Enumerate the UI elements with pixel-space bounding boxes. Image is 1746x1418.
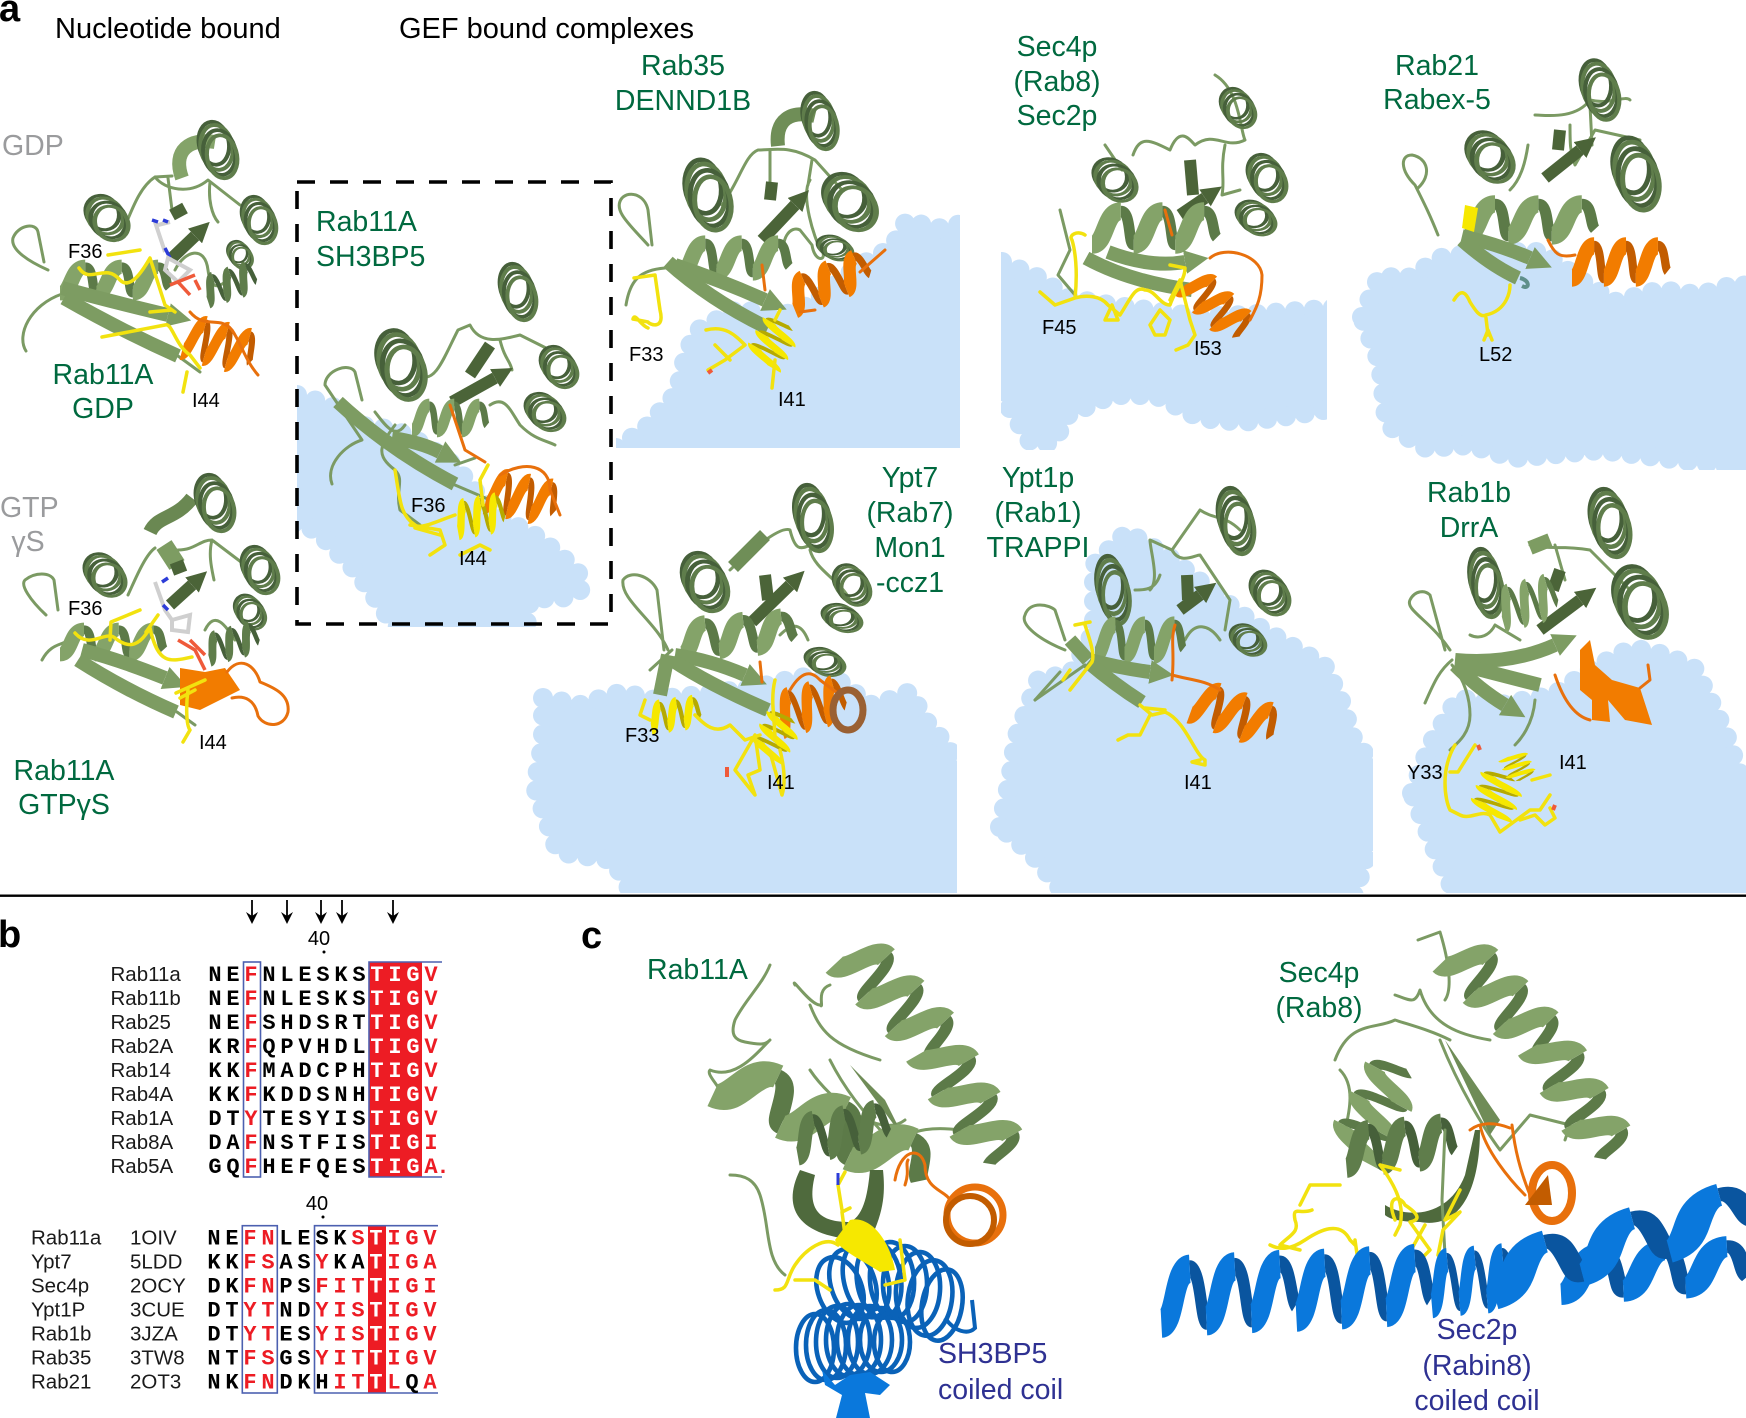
label: Ypt1p Rab1 TRAPPI <box>987 462 1089 564</box>
label: Rab1b DrrA <box>1427 477 1511 544</box>
alignment table: Rab family: TESYIS <box>262 1107 366 1132</box>
protein: Rab21 <box>1403 58 1668 340</box>
alignment table: GEF-bound structures: YIT <box>315 1346 365 1372</box>
alignment table: Rab family: F <box>244 987 258 1012</box>
label: Rab1b DrrA: DrrA <box>1440 512 1498 544</box>
GEF surface: SH3BP5 <box>290 395 583 627</box>
alignment table: Rab family: F <box>244 963 258 988</box>
alignment table: GEF-bound structures: NT <box>207 1346 239 1372</box>
alignment table: GEF-bound structures: IGV <box>387 1298 437 1324</box>
alignment table: GEF-bound structures: A <box>423 1370 437 1396</box>
alignment table: GEF-bound structures: NK <box>207 1370 239 1396</box>
alignment table: GEF-bound structures: YIS <box>315 1298 365 1324</box>
protein: Rab11A GTPgammaS <box>24 472 288 742</box>
GEF surface: TRAPPI <box>1000 532 1380 900</box>
alignment table: Rab family: DT <box>208 1107 240 1132</box>
alignment table: Rab family: F <box>244 1083 258 1108</box>
alignment table: Rab family: MADCPH <box>262 1059 366 1084</box>
label: GDP state: GDP <box>2 130 64 162</box>
GEF surface: Sec2p <box>1002 262 1335 443</box>
GEF surface: DENND1B <box>610 220 968 456</box>
alignment table: GEF-bound structures: Rab11a <box>31 1226 102 1250</box>
alignment table: Rab family: QPVHDL <box>262 1035 366 1060</box>
alignment table: Rab family: NLESKS <box>262 963 366 988</box>
label: F33: F33 <box>629 344 663 366</box>
protein: Rab11A with SH3BP5 coiled coil <box>709 935 1019 1418</box>
alignment table: Rab family: TIG <box>370 987 420 1012</box>
label: Ypt7 Rab7 Mon1-ccz1: Ypt7 <box>882 462 938 494</box>
alignment table: GEF-bound structures: T <box>369 1346 383 1372</box>
label: Sec2p Rabin8 coiled coil: coiled coil <box>1414 1385 1540 1417</box>
label: Sec4p Rab8 Sec2p <box>1013 31 1101 132</box>
label: Ypt7 Rab7 Mon1-ccz1 <box>866 462 954 599</box>
alignment table: Rab family: SHDSRT <box>262 1011 366 1036</box>
alignment table: Rab family: F <box>244 1131 258 1156</box>
alignment table: GEF-bound structures: T <box>369 1250 383 1276</box>
label: I41: I41 <box>767 772 795 794</box>
label: Rab11A GDP: Rab11A <box>53 359 153 391</box>
alignment table: Rab family: I <box>424 1131 438 1156</box>
alignment table: GEF-bound structures: Y <box>315 1250 329 1276</box>
label: Rab11A GTPgammaS: Rab11A <box>14 755 114 787</box>
heading: nucleotide bound: Nucleotide bound <box>55 13 281 45</box>
label: Sec4p Rab8: (Rab8) <box>1275 992 1363 1024</box>
alignment table: GEF-bound structures: FN <box>243 1226 275 1252</box>
alignment table: Rab family: TIG <box>370 1107 420 1132</box>
alignment table: GEF-bound structures: 3JZA <box>130 1322 178 1346</box>
alignment table: Rab family: Y <box>244 1107 258 1132</box>
alignment table: Rab family: Rab1A <box>110 1107 174 1130</box>
panel letter c: c <box>581 915 602 957</box>
alignment table: GEF-bound structures: YT <box>243 1298 275 1324</box>
divider between panels <box>0 894 1746 897</box>
alignment table: GEF-bound structures: 5LDD <box>130 1250 182 1274</box>
alignment table: Rab family: KK <box>208 1083 240 1108</box>
label: F36: F36 <box>411 495 445 517</box>
label: Rab35 DENND1B: Rab35 <box>641 50 725 82</box>
label: Sec4p Rab8 Sec2p: (Rab8) <box>1013 66 1101 98</box>
alignment table: Rab family: Rab25 <box>110 1011 171 1034</box>
alignment table: GEF-bound structures <box>31 1226 437 1396</box>
alignment table: GEF-bound structures: KA <box>333 1250 365 1276</box>
protein: Rab11A bound to SH3BP5 <box>325 261 580 555</box>
label: GTPgammaS state: GTP <box>0 492 59 524</box>
alignment table: Rab family: V <box>424 987 438 1012</box>
alignment table: GEF-bound structures: T <box>369 1370 383 1396</box>
alignment table: GEF-bound structures: Rab35 <box>31 1346 91 1370</box>
protein: Ypt7 <box>623 482 873 795</box>
label: Rab21 Rabex-5: Rab21 <box>1395 50 1479 82</box>
label: Rab11A SH3BP5: SH3BP5 <box>316 241 425 273</box>
alignment table: GEF-bound structures: 2OT3 <box>130 1370 181 1394</box>
label: Sec2p Rabin8 coiled coil: (Rabin8) <box>1422 1350 1532 1382</box>
label: F36: F36 <box>68 598 102 620</box>
alignment table: Rab family: TIG <box>370 963 420 988</box>
alignment table: Rab family: Rab4A <box>110 1083 174 1106</box>
alignment table: GEF-bound structures: Q <box>405 1370 419 1396</box>
label: I41: I41 <box>778 389 806 411</box>
label: Ypt7 Rab7 Mon1-ccz1: (Rab7) <box>866 497 954 529</box>
alignment table: GEF-bound structures: Ypt1P <box>31 1298 85 1322</box>
protein: Rab11A GDP <box>13 119 279 392</box>
alignment table: Rab family: Rab11b <box>110 987 181 1010</box>
alignment table: GEF-bound structures: FS <box>243 1250 275 1276</box>
GEF surface: Mon1-ccz1 <box>535 677 965 900</box>
alignment table: Rab family <box>110 963 450 1180</box>
alignment table: GEF-bound structures: L <box>387 1370 401 1396</box>
alignment highlight: conserved threonine column <box>242 1226 438 1393</box>
label: I53: I53 <box>1194 338 1222 360</box>
alignment table: GEF-bound structures: FIT <box>315 1274 365 1300</box>
alignment table: Rab family: V <box>424 1011 438 1036</box>
dashed box: Rab11A SH3BP5 highlight <box>297 182 611 624</box>
label: I41: I41 <box>1184 772 1212 794</box>
label: Sec2p Rabin8 coiled coil: Sec2p <box>1437 1314 1517 1346</box>
alignment table: Rab family: TIG <box>370 1155 420 1180</box>
alignment table: GEF-bound structures: IGI <box>387 1274 437 1300</box>
label: L52: L52 <box>1479 344 1512 366</box>
alignment table: GEF-bound structures: FS <box>243 1346 275 1372</box>
label: SH3BP5 coiled coil: coiled coil <box>938 1374 1063 1406</box>
alignment table: GEF-bound structures: IGV <box>387 1226 437 1252</box>
alignment table: GEF-bound structures: ND <box>279 1298 311 1324</box>
panel a: nucleotide-bound and GEF-bound structures <box>0 0 1746 900</box>
alignment table: Rab family: NSTFIS <box>262 1131 366 1156</box>
alignment table: GEF-bound structures: H <box>315 1370 329 1396</box>
alignment table: GEF-bound structures: Rab1b <box>31 1322 91 1346</box>
alignment table: Rab family: F <box>244 1011 258 1036</box>
alignment table: Rab family: TIG <box>370 1131 420 1156</box>
protein: Sec4p <box>1040 75 1289 350</box>
position marker: 40: 40 <box>308 928 330 950</box>
label: Ypt1p Rab1 TRAPPI: Ypt1p <box>1002 462 1074 494</box>
alignment table: Rab family: NLESKS <box>262 987 366 1012</box>
alignment table: Rab family: TIG <box>370 1083 420 1108</box>
label: Sec4p Rab8 <box>1275 957 1363 1024</box>
label: Sec2p Rabin8 coiled coil <box>1414 1314 1540 1417</box>
alignment table: Rab family: NE <box>208 963 240 988</box>
alignment table: Rab family: F <box>244 1035 258 1060</box>
alignment table: GEF-bound structures: DK <box>279 1370 311 1396</box>
alignment table: Rab family: TIG <box>370 1011 420 1036</box>
label: Y33: Y33 <box>1407 762 1443 784</box>
alignment table: Rab family: TIG <box>370 1035 420 1060</box>
label: I44: I44 <box>459 548 487 570</box>
alignment table: Rab family: NE <box>208 1011 240 1036</box>
label: F36: F36 <box>68 241 102 263</box>
label: SH3BP5 coiled coil: SH3BP5 <box>938 1338 1047 1370</box>
alignment table: GEF-bound structures: KK <box>207 1250 239 1276</box>
GEF surface: Rabex-5 <box>1362 252 1746 470</box>
protein: Rab35 <box>619 90 885 388</box>
alignment table: GEF-bound structures: YIS <box>315 1322 365 1348</box>
label: Ypt7 Rab7 Mon1-ccz1: Mon1 <box>874 532 946 564</box>
alignment table: GEF-bound structures: T <box>369 1226 383 1252</box>
label: GTPgammaS state: γS <box>11 526 45 558</box>
panel b: sequence alignments <box>0 900 450 1396</box>
GEF surface: DrrA <box>1412 648 1746 900</box>
alignment table: Rab family: A. <box>424 1155 450 1180</box>
alignment table: GEF-bound structures: YT <box>243 1322 275 1348</box>
label: Rab11A GDP <box>53 359 153 425</box>
label: Ypt7 Rab7 Mon1-ccz1: -ccz1 <box>876 567 944 599</box>
alignment table: Rab family: V <box>424 1107 438 1132</box>
alignment table: GEF-bound structures: DK <box>207 1274 239 1300</box>
alignment table: Rab family: F <box>244 1155 258 1180</box>
alignment table: Rab family: Rab2A <box>110 1035 174 1058</box>
label: Rab11A GDP: GDP <box>72 393 134 425</box>
alignment table: GEF-bound structures: 3CUE <box>130 1298 185 1322</box>
protein: Rab1b <box>1409 486 1670 832</box>
alignment table: GEF-bound structures: T <box>369 1274 383 1300</box>
alignment table: GEF-bound structures: DT <box>207 1322 239 1348</box>
alignment table: GEF-bound structures: 2OCY <box>130 1274 186 1298</box>
alignment table: GEF-bound structures: 1OIV <box>130 1226 177 1250</box>
heading: GEF bound complexes: GEF bound complexes <box>399 13 694 45</box>
label: Rab11A GTPgammaS <box>14 755 114 821</box>
panel c: coiled coil interaction comparison <box>581 915 1746 1418</box>
protein: Ypt1p <box>1024 485 1292 765</box>
alignment table: GEF-bound structures: AS <box>279 1250 311 1276</box>
label: Rab1b DrrA: Rab1b <box>1427 477 1511 509</box>
alignment table: Rab family: KDDSNH <box>262 1083 366 1108</box>
alignment table: Rab family: NE <box>208 987 240 1012</box>
alignment table: Rab family: Rab8A <box>110 1131 174 1154</box>
label: Ypt1p Rab1 TRAPPI: (Rab1) <box>994 497 1082 529</box>
protein: Sec4p with Sec2p coiled coil <box>1159 932 1746 1324</box>
label: I41: I41 <box>1559 752 1587 774</box>
alignment table: Rab family: V <box>424 1059 438 1084</box>
label: GTPgammaS state <box>0 492 59 558</box>
label: F33: F33 <box>625 725 659 747</box>
label: Sec4p Rab8: Sec4p <box>1279 957 1359 989</box>
label: Ypt1p Rab1 TRAPPI: TRAPPI <box>987 532 1089 564</box>
alignment table: GEF-bound structures: IGA <box>387 1250 437 1276</box>
alignment table: Rab family: KR <box>208 1035 240 1060</box>
label: I44: I44 <box>199 732 227 754</box>
label: Rab21 Rabex-5: Rabex-5 <box>1383 84 1491 116</box>
alignment table: GEF-bound structures: T <box>369 1322 383 1348</box>
alignment table: GEF-bound structures: IGV <box>387 1346 437 1372</box>
alignment table: GEF-bound structures: LESK <box>279 1226 347 1252</box>
label: Sec4p Rab8 Sec2p: Sec2p <box>1017 100 1097 132</box>
alignment table: Rab family: TIG <box>370 1059 420 1084</box>
alignment table: GEF-bound structures: FN <box>243 1370 275 1396</box>
alignment table: Rab family: V <box>424 1035 438 1060</box>
arrows: key residues <box>246 900 399 924</box>
alignment table: GEF-bound structures: Rab21 <box>31 1370 91 1394</box>
label: Rab11A SH3BP5 <box>316 206 425 273</box>
alignment table: Rab family: Rab14 <box>110 1059 171 1082</box>
alignment table: GEF-bound structures: GS <box>279 1346 311 1372</box>
label: Rab35 DENND1B: DENND1B <box>615 85 751 117</box>
alignment table: Rab family: DA <box>208 1131 240 1156</box>
alignment table: Rab family: F <box>244 1059 258 1084</box>
alignment table: GEF-bound structures: IT <box>333 1370 365 1396</box>
label: Rab11A SH3BP5: Rab11A <box>316 206 417 238</box>
position marker: 40: 40 <box>306 1193 328 1215</box>
label: I44: I44 <box>192 390 220 412</box>
label: Sec4p Rab8 Sec2p: Sec4p <box>1017 31 1097 63</box>
label: Rab35 DENND1B <box>615 50 751 117</box>
alignment table: GEF-bound structures: Ypt7 <box>31 1250 72 1274</box>
alignment table: GEF-bound structures: ES <box>279 1322 311 1348</box>
alignment table: GEF-bound structures: 3TW8 <box>130 1346 185 1370</box>
alignment table: GEF-bound structures: DT <box>207 1298 239 1324</box>
label: Rab11A GTPgammaS: GTPγS <box>18 789 110 821</box>
alignment table: GEF-bound structures: IGV <box>387 1322 437 1348</box>
alignment table: Rab family: V <box>424 1083 438 1108</box>
alignment table: GEF-bound structures: Sec4p <box>31 1274 89 1298</box>
alignment table: Rab family: GQ <box>208 1155 240 1180</box>
alignment table: Rab family: KK <box>208 1059 240 1084</box>
label: Rab21 Rabex-5 <box>1383 50 1491 116</box>
alignment table: GEF-bound structures: NE <box>207 1226 239 1252</box>
label: Rab11A: Rab11A <box>647 954 748 986</box>
alignment table: GEF-bound structures: FN <box>243 1274 275 1300</box>
alignment table: Rab family: HEFQES <box>262 1155 366 1180</box>
alignment table: Rab family: V <box>424 963 438 988</box>
alignment table: GEF-bound structures: T <box>369 1298 383 1324</box>
label: SH3BP5 coiled coil <box>938 1338 1063 1406</box>
alignment table: Rab family: Rab11a <box>110 963 181 986</box>
alignment table: Rab family: Rab5A <box>110 1155 174 1178</box>
label: F45: F45 <box>1042 317 1076 339</box>
alignment table: GEF-bound structures: PS <box>279 1274 311 1300</box>
alignment table: GEF-bound structures: S <box>351 1226 365 1252</box>
alignment highlight: conserved column block <box>244 962 442 1177</box>
